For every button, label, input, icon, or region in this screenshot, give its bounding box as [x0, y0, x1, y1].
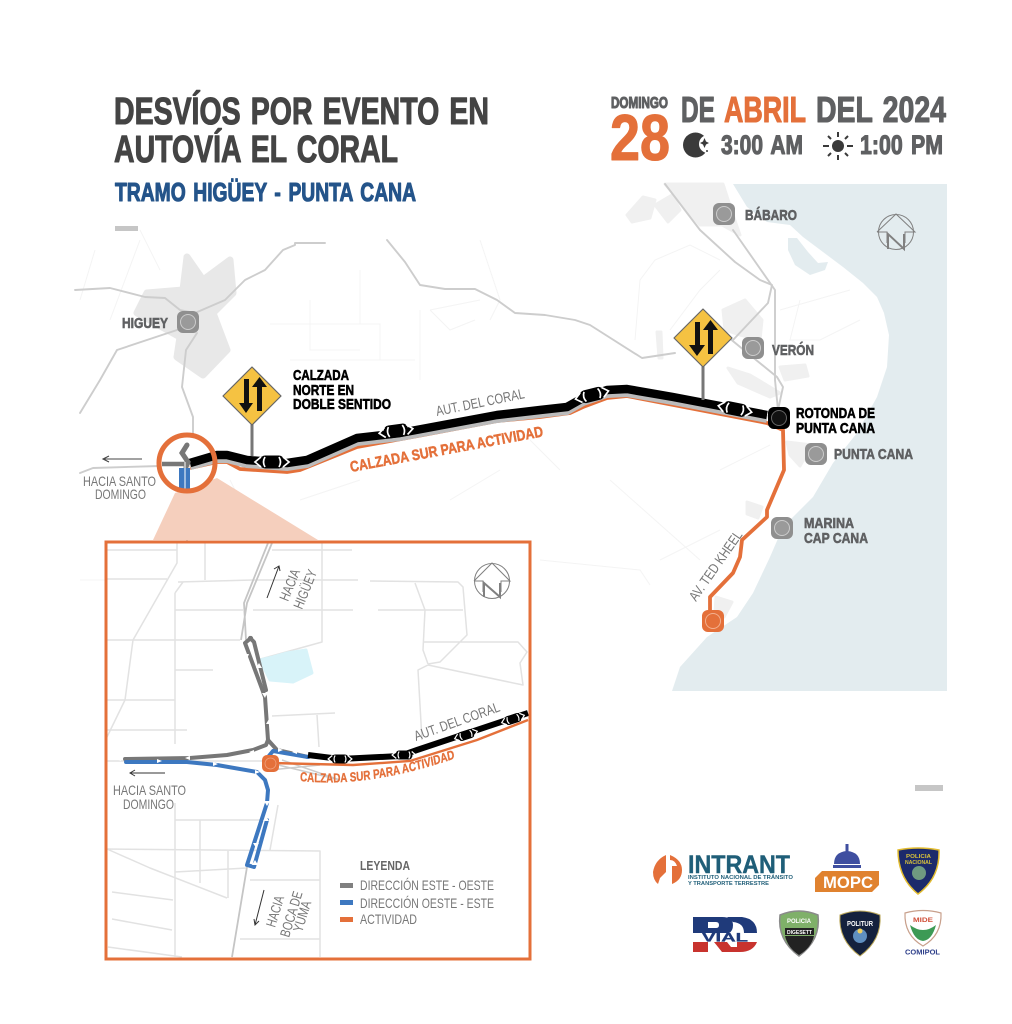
- route: south carriageway for activity: [190, 396, 784, 613]
- inset label: Hacia Santo Domingo: DOMINGO: [123, 796, 174, 812]
- inset through road: [232, 543, 272, 957]
- inset direction arrowheads: [116, 654, 297, 865]
- date block: 28: [610, 101, 670, 174]
- title: DESVÍOS POR EVENTO EN: [114, 89, 489, 133]
- logo: INTRANT: [653, 851, 794, 887]
- label: Calzada norte en doble sentido: [293, 367, 391, 413]
- legend: DIRECCIÓN ESTE - OESTE: [360, 877, 494, 893]
- gray tab left: [115, 226, 138, 231]
- marker: Rotonda de Punta Cana: [768, 407, 790, 429]
- inset label: Hacia Higüey: HACIA: [276, 566, 303, 603]
- label: Bábaro: BÁBARO: [745, 207, 797, 224]
- logo: COMIPOL: [905, 910, 941, 956]
- sea: [672, 184, 947, 691]
- inset label: Hacia Higüey: HIGÜEY: [289, 566, 320, 611]
- detail circle: [159, 435, 215, 491]
- label: Rotonda de Punta Cana: PUNTA CANA: [796, 420, 875, 437]
- inset label: Hacia Boca de Yuma: HACIA: [263, 893, 287, 929]
- label: Marina Cap Cana: MARINA: [804, 515, 854, 532]
- highways: [75, 184, 783, 540]
- legend: DIRECCIÓN OESTE - ESTE: [360, 895, 494, 911]
- sign: two-way west: [223, 367, 281, 456]
- lagoon: [788, 238, 828, 275]
- inset arrow: to Higüey: [267, 566, 280, 598]
- marker: Bábaro: [713, 203, 735, 225]
- date block: DOMINGO: [611, 95, 668, 112]
- legend: ACTIVIDAD: [360, 911, 417, 927]
- inset label: Hacia Higüey: [276, 566, 320, 611]
- logo: DIGESETT: DIGESETT: [787, 930, 813, 936]
- logo: COMIPOL: MIDE: [913, 918, 933, 924]
- date block: DE: [681, 89, 715, 130]
- inset arrow: to Boca de Yuma: [254, 890, 264, 925]
- label: Calzada norte en doble sentido: CALZADA: [293, 367, 349, 384]
- logo: POLITUR: [840, 911, 880, 956]
- logo: RD Vial: [693, 917, 757, 952]
- logo: DIGESETT: POLICIA: [787, 919, 812, 925]
- label: Marina Cap Cana: CAP CANA: [804, 530, 868, 547]
- logo: Policía Nacional: [898, 848, 939, 894]
- inset blue route: [126, 751, 308, 867]
- label: Marina Cap Cana: [804, 515, 868, 547]
- inset label: Hacia Boca de Yuma: [263, 889, 314, 939]
- date block: ABRIL: [724, 89, 806, 130]
- title: [114, 89, 489, 171]
- inset label: Hacia Santo Domingo: [113, 782, 186, 812]
- label: Rotonda de Punta Cana: [796, 405, 875, 437]
- inset arrow: to Santo Domingo: [130, 770, 165, 776]
- inset label: Hacia Santo Domingo: HACIA SANTO: [113, 782, 186, 798]
- logo: INTRANT: INTRANT: [688, 851, 790, 879]
- logo: POLITUR: POLITUR: [847, 921, 873, 928]
- label: Hacia Santo Domingo: HACIA SANTO: [83, 473, 156, 489]
- zoom cone: [153, 478, 318, 540]
- inset orange route: [272, 720, 528, 765]
- logo: DIGESETT: [780, 911, 818, 956]
- sign: two-way east: [674, 309, 732, 400]
- label: Verón: VERÓN: [772, 341, 814, 359]
- logo: COMIPOL: COMIPOL: [905, 950, 941, 956]
- icon: sun: [823, 132, 853, 160]
- marker: Verón: [742, 337, 764, 359]
- logo: MOPC: MOPC: [823, 873, 873, 892]
- panel: regional map: [75, 184, 947, 691]
- date block: DEL 2024: [816, 89, 946, 130]
- label: Aut. del Coral: AUT. DEL CORAL: [434, 385, 526, 419]
- date block: 1:00 PM: [860, 130, 943, 160]
- compass: regional map: [877, 214, 915, 250]
- inset label: Hacia Boca de Yuma: YUMA: [290, 898, 314, 934]
- marker: Higuey: [177, 311, 199, 333]
- label: Calzada norte en doble sentido: NORTE EN: [293, 382, 354, 399]
- marker: activity: [702, 610, 724, 632]
- label: Hacia Santo Domingo: [83, 473, 156, 502]
- logo: Policía Nacional: NACIONAL: [905, 860, 932, 866]
- panel: inset map: [104, 540, 532, 960]
- gray tab right: [915, 785, 943, 791]
- legend: LEYENDA: [360, 858, 410, 873]
- label: Rotonda de Punta Cana: ROTONDA DE: [796, 405, 875, 422]
- inset lake: [260, 650, 312, 682]
- label: Punta Cana: PUNTA CANA: [834, 446, 913, 463]
- label: Av. Ted Kheel: AV. TED KHEEL: [685, 527, 746, 604]
- date block: 3:00 AM: [721, 130, 803, 160]
- label: Higuey: HIGUEY: [122, 315, 168, 332]
- legend: [340, 858, 494, 927]
- label: Hacia Santo Domingo: DOMINGO: [95, 486, 146, 502]
- label: Calzada sur para actividad: CALZADA SUR PARA ACTIVIDAD: [349, 423, 545, 476]
- date block: [610, 89, 946, 174]
- faint local roads: [80, 230, 860, 585]
- inset label: Aut. del Coral: AUT. DEL CORAL: [412, 699, 502, 744]
- marker: Marina Cap Cana: [771, 517, 793, 539]
- inset gray route: [125, 638, 308, 759]
- arrow: to Santo Domingo: [103, 456, 142, 462]
- inset label: Hacia Boca de Yuma: BOCA DE: [277, 889, 306, 939]
- label: Calzada norte en doble sentido: DOBLE SENTIDO: [293, 396, 391, 413]
- detail circle background: [160, 436, 214, 490]
- route: north carriageway two-way: [190, 385, 767, 468]
- urban areas: [137, 184, 812, 617]
- marker: Punta Cana: [805, 443, 827, 465]
- logo: INTRANT: Y TRANSPORTE TERRESTRE: [688, 881, 769, 887]
- logo: MOPC: [815, 844, 879, 892]
- inset black route: [308, 711, 528, 764]
- inset frame: [106, 542, 530, 959]
- inset orange marker: [262, 755, 279, 772]
- logo: Policía Nacional: POLICIA: [906, 854, 931, 860]
- logo: INTRANT: INSTITUTO NACIONAL DE TRÁNSITO: [688, 874, 794, 881]
- inset local roads: [107, 543, 527, 957]
- icon: moon: [683, 132, 717, 158]
- subtitle: TRAMO HIGÜEY - PUNTA CANA: [115, 177, 416, 207]
- logo: RD Vial: VIAL: [702, 930, 748, 944]
- inset label: Calzada sur para actividad: CALZADA SUR PARA ACTIVIDAD: [300, 750, 454, 783]
- compass: inset: [474, 563, 510, 598]
- title: AUTOVÍA EL CORAL: [114, 127, 398, 171]
